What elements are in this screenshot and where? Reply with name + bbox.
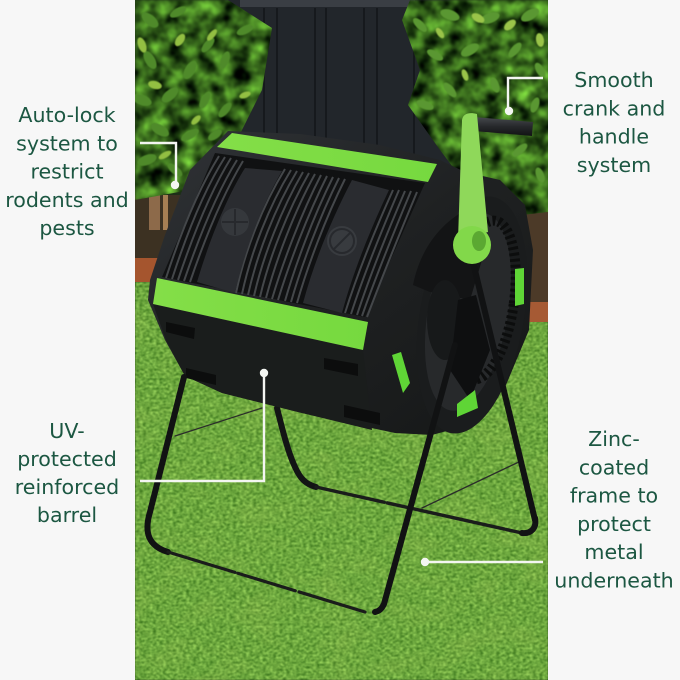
barrel: bottom green strip: [153, 278, 368, 350]
photo: dark timber fence: [225, 0, 450, 170]
photo: lawn: [135, 282, 548, 680]
barrel: hand slots: [166, 322, 380, 425]
photo: right hedge: [400, 0, 550, 216]
tumbler stand: front leg: [147, 262, 535, 612]
barrel: end disc: [400, 188, 544, 442]
text: UV-protected barrel: reinforced: [15, 475, 119, 499]
text: UV-protected barrel: barrel: [37, 503, 97, 527]
photo: left hedge: [131, 0, 275, 200]
barrel: top green strip: [217, 133, 437, 182]
text: zinc-coated frame: coated: [579, 455, 649, 479]
product photo: [131, 0, 550, 680]
text: zinc-coated frame: Zinc-: [588, 427, 640, 451]
text: auto-lock system: rodents and: [5, 188, 129, 212]
text: zinc-coated frame: protect: [577, 512, 651, 536]
text: UV-protected barrel: UV-: [49, 419, 85, 443]
compost tumbler barrel: [148, 131, 544, 442]
text: auto-lock system: restrict: [30, 160, 104, 184]
crank and handle: [453, 113, 533, 264]
crank: handle grip: [474, 117, 533, 136]
crank: hub: [453, 226, 491, 264]
barrel: flat panel with plus mark: [197, 168, 282, 293]
text: zinc-coated frame: underneath: [554, 568, 674, 592]
callout: auto-lock line: [140, 143, 179, 189]
text: smooth crank: system: [577, 153, 651, 177]
text: smooth crank: crank and: [563, 96, 665, 120]
barrel: flat panel with minus mark: [303, 180, 389, 313]
text: auto-lock system: Auto-lock: [18, 103, 116, 127]
callout: crank line: [505, 78, 543, 115]
text: smooth crank: Smooth: [574, 68, 654, 92]
barrel: ribbed upper panel: [162, 153, 425, 317]
callout: barrel line: [140, 369, 268, 481]
text: zinc-coated frame: frame to: [570, 484, 658, 508]
crank: green arm: [458, 113, 488, 240]
tumbler stand: rear leg: [175, 408, 535, 533]
text: smooth crank: handle: [579, 125, 649, 149]
barrel: main body: [148, 131, 533, 435]
text: zinc-coated frame: metal: [584, 540, 644, 564]
text: UV-protected barrel: protected: [17, 447, 117, 471]
barrel: lower front panel: [153, 304, 372, 430]
barrel: green tabs: [392, 268, 524, 417]
text: auto-lock system: pests: [39, 216, 95, 240]
text: auto-lock system: system to: [16, 131, 118, 155]
callout: frame line: [421, 558, 543, 566]
photo: garden bed and edging: [135, 192, 548, 322]
